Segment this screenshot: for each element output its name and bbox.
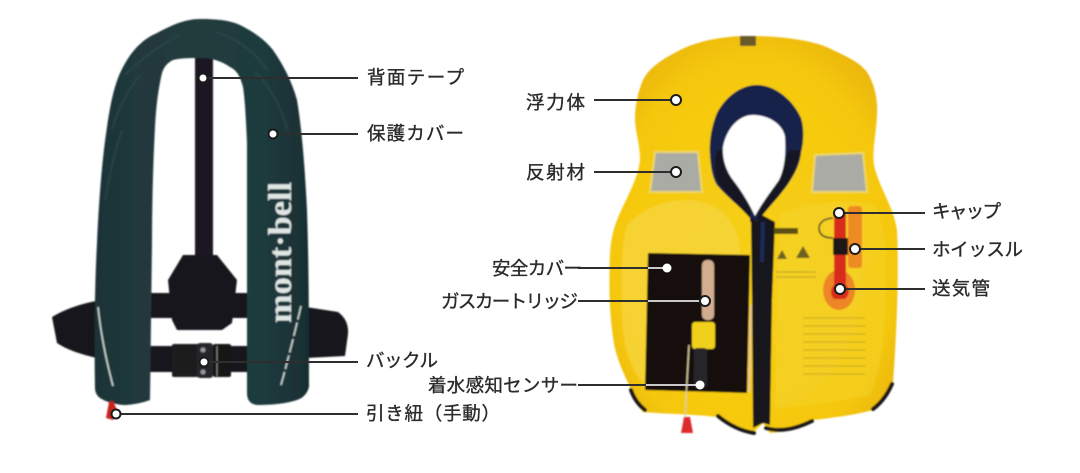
callout: buoyancy body: [526, 92, 681, 113]
buoyancy body: [609, 36, 898, 433]
orange whistle: [848, 206, 862, 268]
panel: front view of the vest: [609, 36, 898, 433]
callout: gas cartridge: ガスカートリッジ: [441, 291, 578, 312]
callout: reflector: [526, 162, 681, 183]
hem binding: [631, 384, 892, 433]
orange inflation base: [823, 270, 855, 310]
reflective patches: [650, 152, 702, 192]
back tape strap: [195, 56, 213, 258]
collar: [710, 85, 803, 222]
callout: inflation tube: [835, 278, 990, 299]
callout: protective cover: 保護カバー: [367, 123, 464, 144]
callout: whistle: ホイッスル: [932, 239, 1023, 260]
callout: manual pull cord: [112, 403, 500, 424]
callout: cap: [834, 201, 1001, 222]
top tab: [740, 36, 756, 46]
callout: reflector: 反射材: [526, 162, 585, 183]
neck opening: [723, 115, 785, 216]
callout: protective cover: [268, 123, 464, 144]
logo: mont·bell: [263, 182, 299, 323]
callout: back tape: [198, 67, 464, 88]
callout: safety cover: 安全カバー: [492, 258, 582, 279]
back pad: [168, 255, 237, 330]
callout: gas cartridge: [441, 291, 710, 312]
protective cover: [95, 19, 309, 405]
callout: water sensor: 着水感知センサー: [428, 375, 578, 396]
cover fold shading: [105, 32, 288, 200]
callout: buckle: バックル: [366, 350, 438, 371]
warning print: [774, 228, 866, 374]
safety cover pocket: [645, 253, 750, 393]
callout: buckle: [200, 350, 438, 371]
pull cord: [685, 345, 689, 418]
callout: safety cover: [492, 258, 672, 279]
callout: water sensor: [428, 375, 704, 396]
panel: back view of the vest: [52, 19, 348, 420]
red toggle: [681, 417, 693, 433]
callout: inflation tube: 送気管: [932, 278, 990, 299]
gas cartridge: [702, 260, 714, 320]
red pull toggle: [106, 401, 118, 420]
lighter inner panel: [622, 200, 740, 385]
water sensor: [694, 348, 707, 388]
callout: cap: キャップ: [932, 201, 1001, 222]
callout: buoyancy body: 浮力体: [526, 92, 585, 113]
waist belt: [52, 293, 348, 372]
center zip placket: [751, 215, 775, 428]
callout: manual pull cord: 引き紐（手動）: [366, 403, 500, 424]
callout: back tape: 背面テープ: [367, 67, 464, 88]
reflective stripes: [98, 306, 301, 386]
red inflation tube: [831, 212, 849, 299]
callout: whistle: [850, 239, 1023, 260]
buckle: [172, 343, 231, 378]
cap ring: [819, 218, 833, 238]
inflator head: [692, 322, 715, 349]
